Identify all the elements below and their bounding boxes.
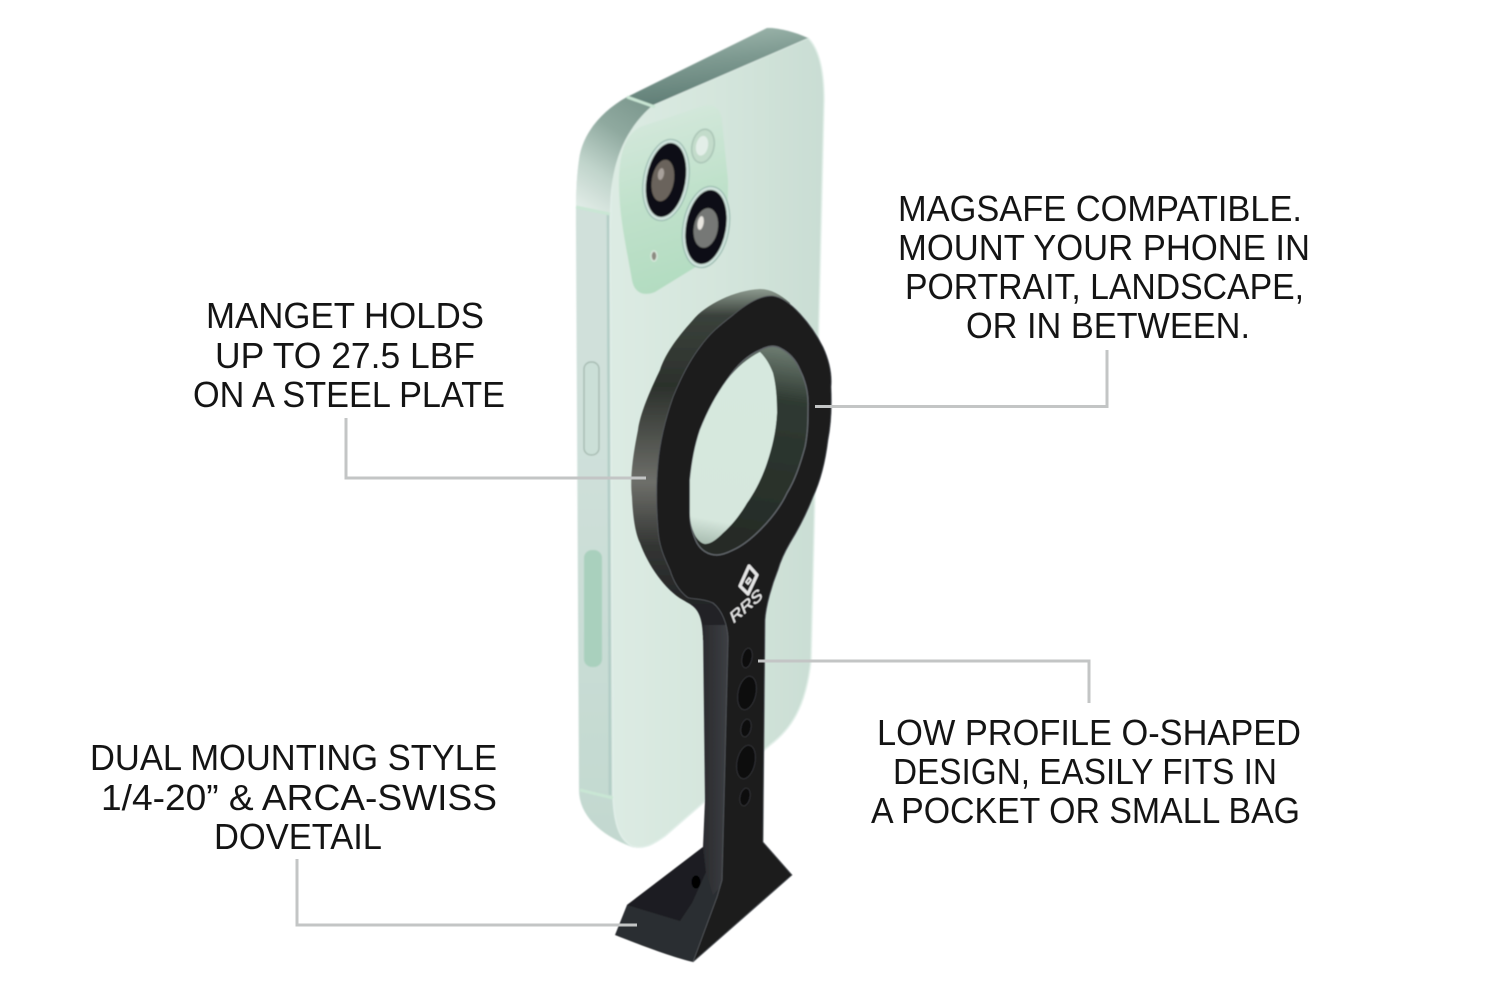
ring opening inner wall <box>690 346 808 555</box>
ring side thickness <box>631 289 790 640</box>
base plate silhouette <box>615 847 726 962</box>
base plate mounting hole <box>692 876 700 888</box>
flash <box>689 127 717 165</box>
leader line: MagSafe <box>815 350 1107 406</box>
stem tripod holes <box>734 647 759 807</box>
RRS logo text: RRS <box>728 586 765 628</box>
base plate top surface <box>627 847 706 921</box>
mount: O-ring and stem <box>615 289 831 962</box>
callout: low profile design: DESIGN, EASILY FITS IN <box>893 751 1277 792</box>
leader line: magnet <box>346 418 646 478</box>
phone body silhouette and side <box>576 28 824 848</box>
callout: low profile design: A POCKET OR SMALL BAG <box>871 790 1300 831</box>
volume button <box>584 362 599 455</box>
phone back glass <box>610 38 824 847</box>
leader line: dual mounting <box>297 859 637 925</box>
callout: low profile design: LOW PROFILE O-SHAPED <box>877 712 1301 753</box>
camera bump <box>619 105 736 294</box>
callout: MagSafe compatible: MAGSAFE COMPATIBLE. <box>898 188 1302 229</box>
callout: magnet holds: MANGET HOLDS <box>206 295 484 336</box>
microphone <box>651 251 657 261</box>
callout: magnet holds <box>193 295 505 415</box>
callout: dual mounting style: DUAL MOUNTING STYLE <box>90 737 497 778</box>
leader line: low profile <box>758 661 1089 703</box>
callout: MagSafe compatible: OR IN BETWEEN. <box>966 305 1250 346</box>
callout: MagSafe compatible: PORTRAIT, LANDSCAPE, <box>905 266 1304 307</box>
callout: dual mounting style <box>90 737 497 857</box>
phone top corner <box>576 97 653 214</box>
lens lower <box>676 183 736 271</box>
lens upper <box>637 136 695 224</box>
lower side band <box>584 550 602 667</box>
callout: dual mounting style: DOVETAIL <box>214 816 382 857</box>
callout: MagSafe compatible: MOUNT YOUR PHONE IN <box>898 227 1310 268</box>
ring and stem front face <box>656 296 831 962</box>
phone seen through ring <box>690 352 777 544</box>
antenna lines <box>576 97 655 798</box>
phone top edge band <box>627 28 808 105</box>
callout: MagSafe compatible <box>898 188 1310 346</box>
icon: RRS logo mark <box>740 566 757 594</box>
callout: low profile design <box>871 712 1301 831</box>
phone <box>576 28 824 848</box>
callout: magnet holds: UP TO 27.5 LBF <box>215 335 475 376</box>
callout: magnet holds: ON A STEEL PLATE <box>193 374 505 415</box>
callout: dual mounting style: 1/4-20” & ARCA-SWISS <box>101 777 497 818</box>
stem side <box>703 625 728 895</box>
side seam <box>608 214 610 795</box>
